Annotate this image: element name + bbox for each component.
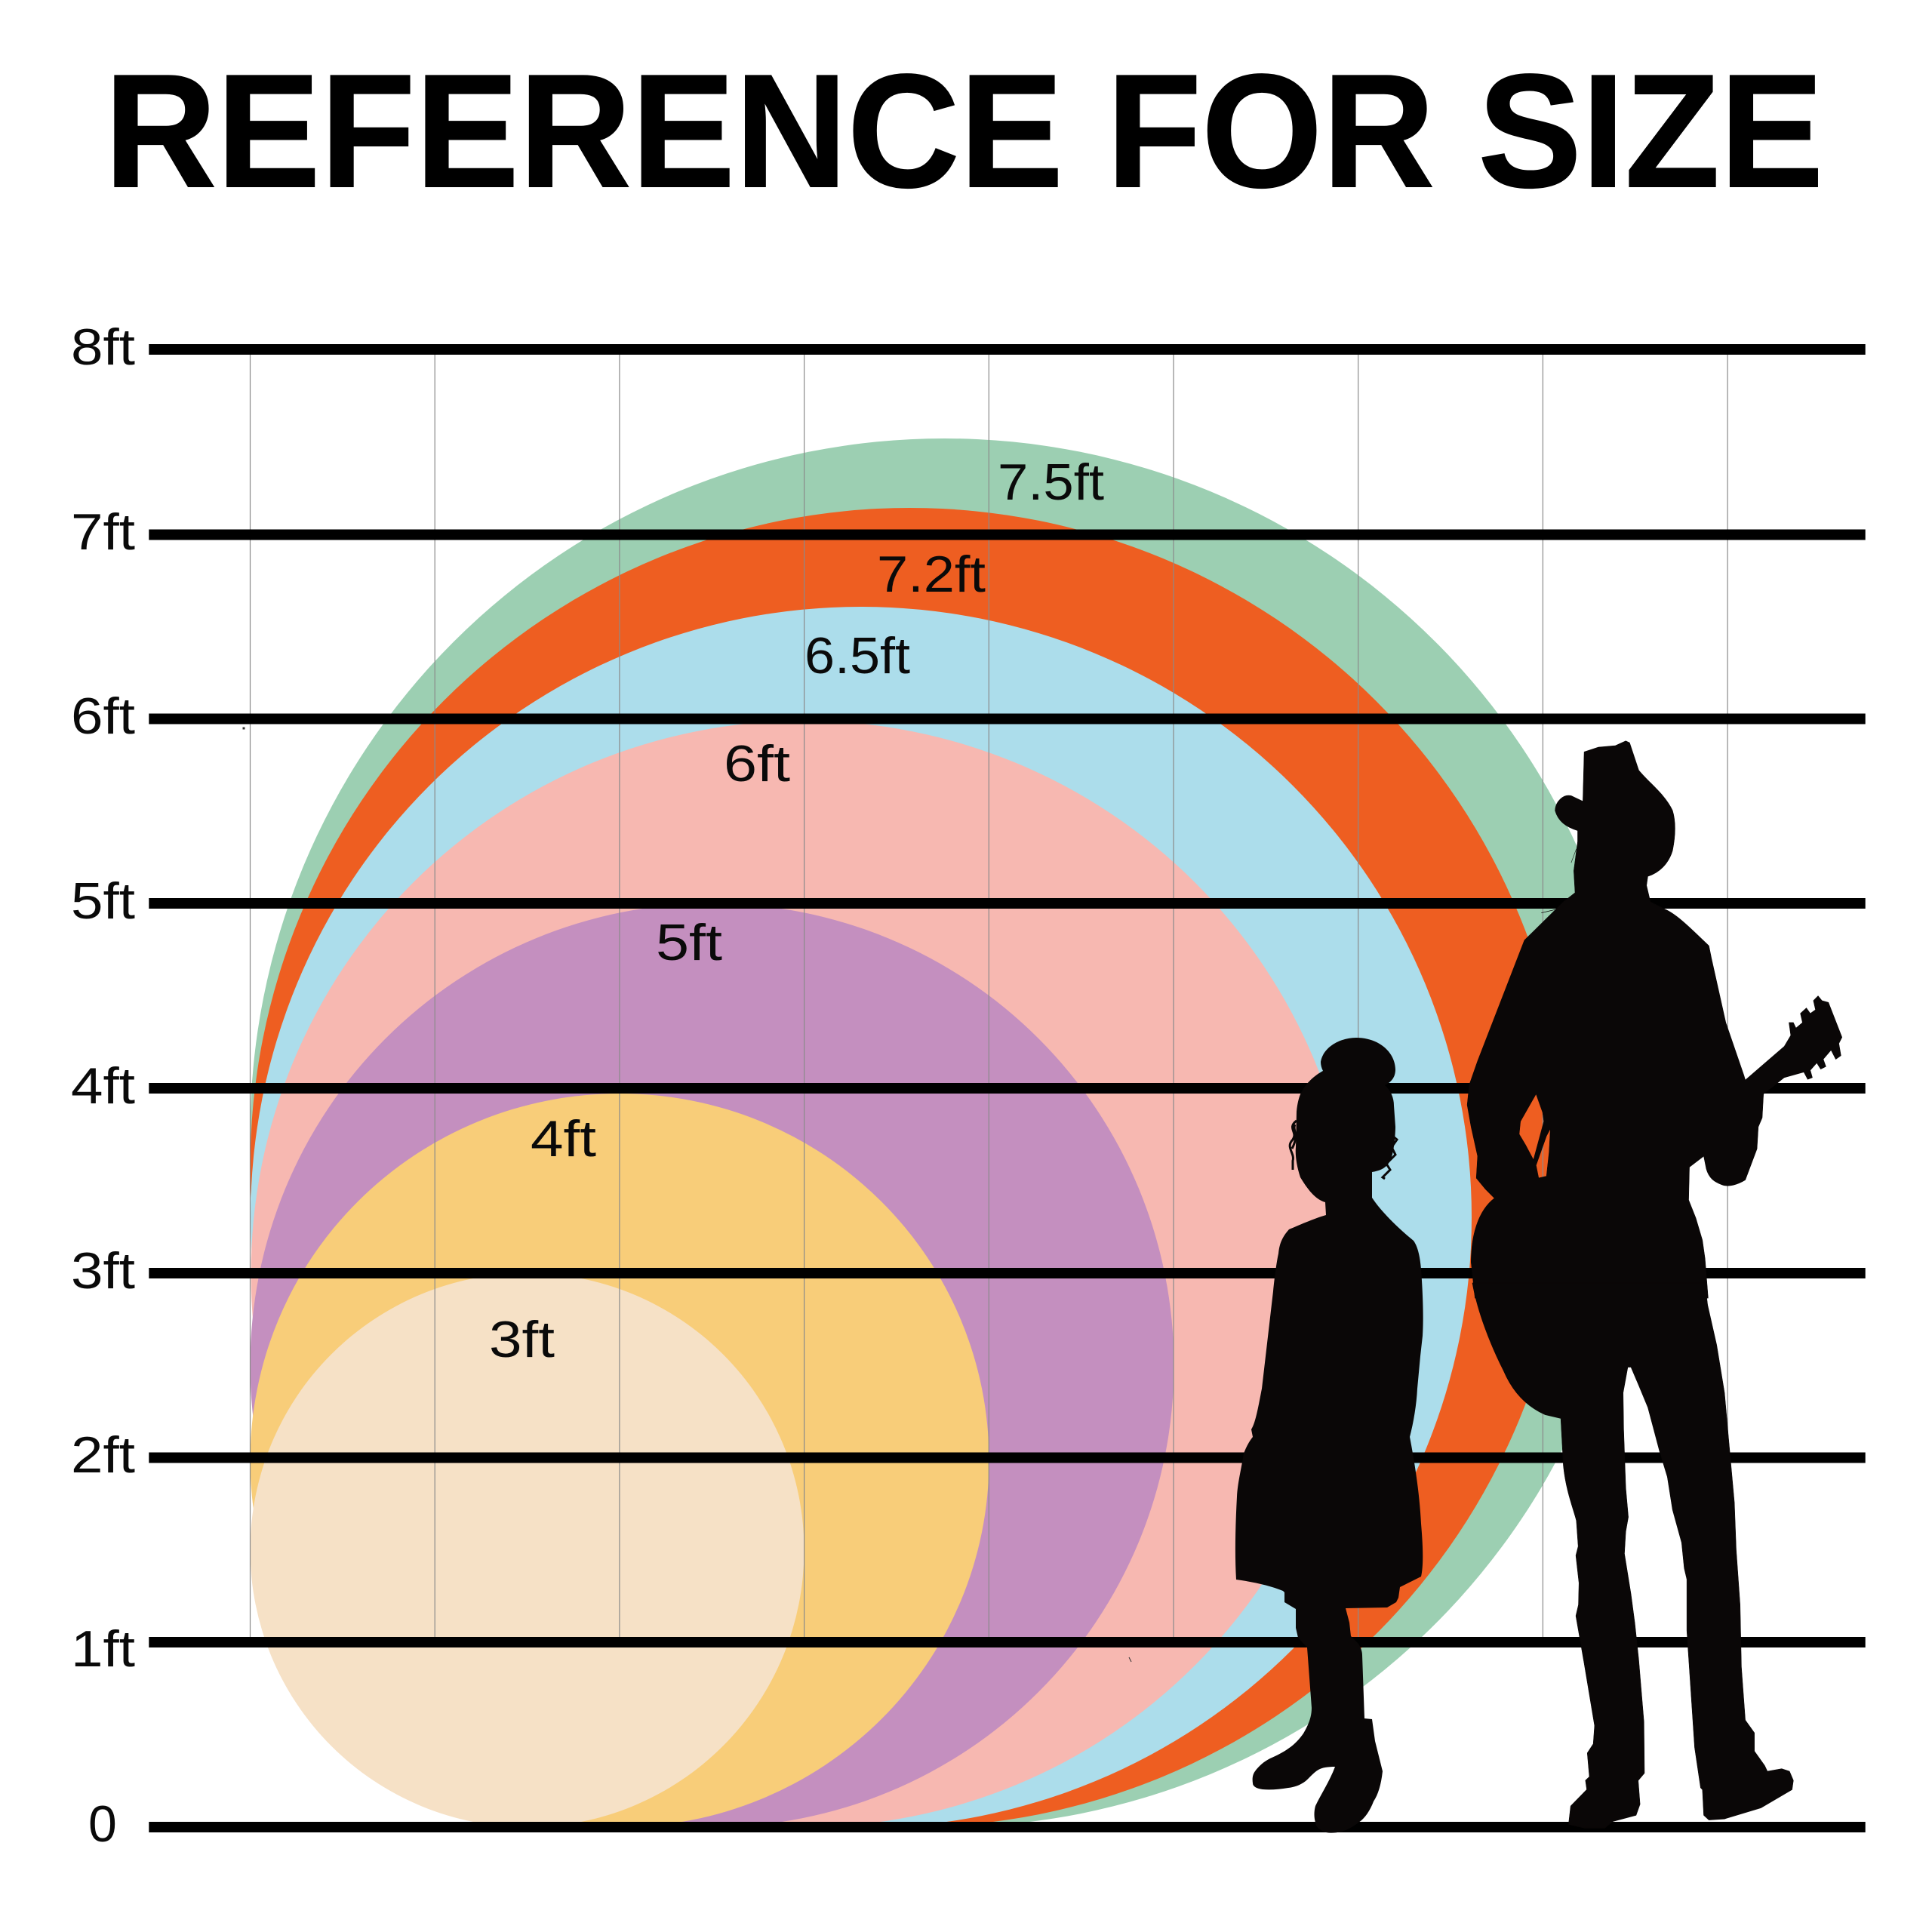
label: 4ft: 4ft <box>71 1057 135 1115</box>
label: 0: 0 <box>88 1795 117 1853</box>
man legs and boots <box>1472 1283 1793 1828</box>
circle label: 7.5ft: 7.5ft <box>998 454 1104 511</box>
circle label: 6.5ft: 6.5ft <box>804 627 910 685</box>
chart: nested size circles <box>251 438 1639 1828</box>
circle: 3ft <box>251 1273 804 1827</box>
circle label: 5ft: 5ft <box>656 914 722 971</box>
axis labels <box>71 318 135 1853</box>
label: 1ft: 1ft <box>71 1620 135 1678</box>
silhouette: girl <box>1235 1038 1423 1833</box>
circle label: 4ft: 4ft <box>531 1110 596 1168</box>
label: 5ft: 5ft <box>71 872 135 930</box>
circle: 6.5ft <box>251 607 1472 1828</box>
circle: 7.2ft <box>251 508 1570 1827</box>
silhouette: man with guitar <box>1467 741 1842 1828</box>
label: 7ft: 7ft <box>71 503 135 561</box>
man upper body and guitar <box>1467 741 1842 1298</box>
label: 6ft: 6ft <box>71 688 135 745</box>
circle labels <box>489 454 1104 1368</box>
title: REFERENCE FOR SIZE <box>104 41 1823 221</box>
circle: 5ft <box>251 903 1174 1827</box>
circle label: 6ft: 6ft <box>724 735 790 792</box>
circle: 4ft <box>251 1094 989 1827</box>
circle: 6ft <box>251 721 1357 1827</box>
label: 3ft: 3ft <box>71 1242 135 1300</box>
circle: 7.5ft <box>251 438 1639 1827</box>
label: 8ft: 8ft <box>71 318 135 376</box>
circle label: 3ft: 3ft <box>489 1311 555 1368</box>
circle label: 7.2ft: 7.2ft <box>877 546 986 603</box>
label: 2ft: 2ft <box>71 1426 135 1484</box>
